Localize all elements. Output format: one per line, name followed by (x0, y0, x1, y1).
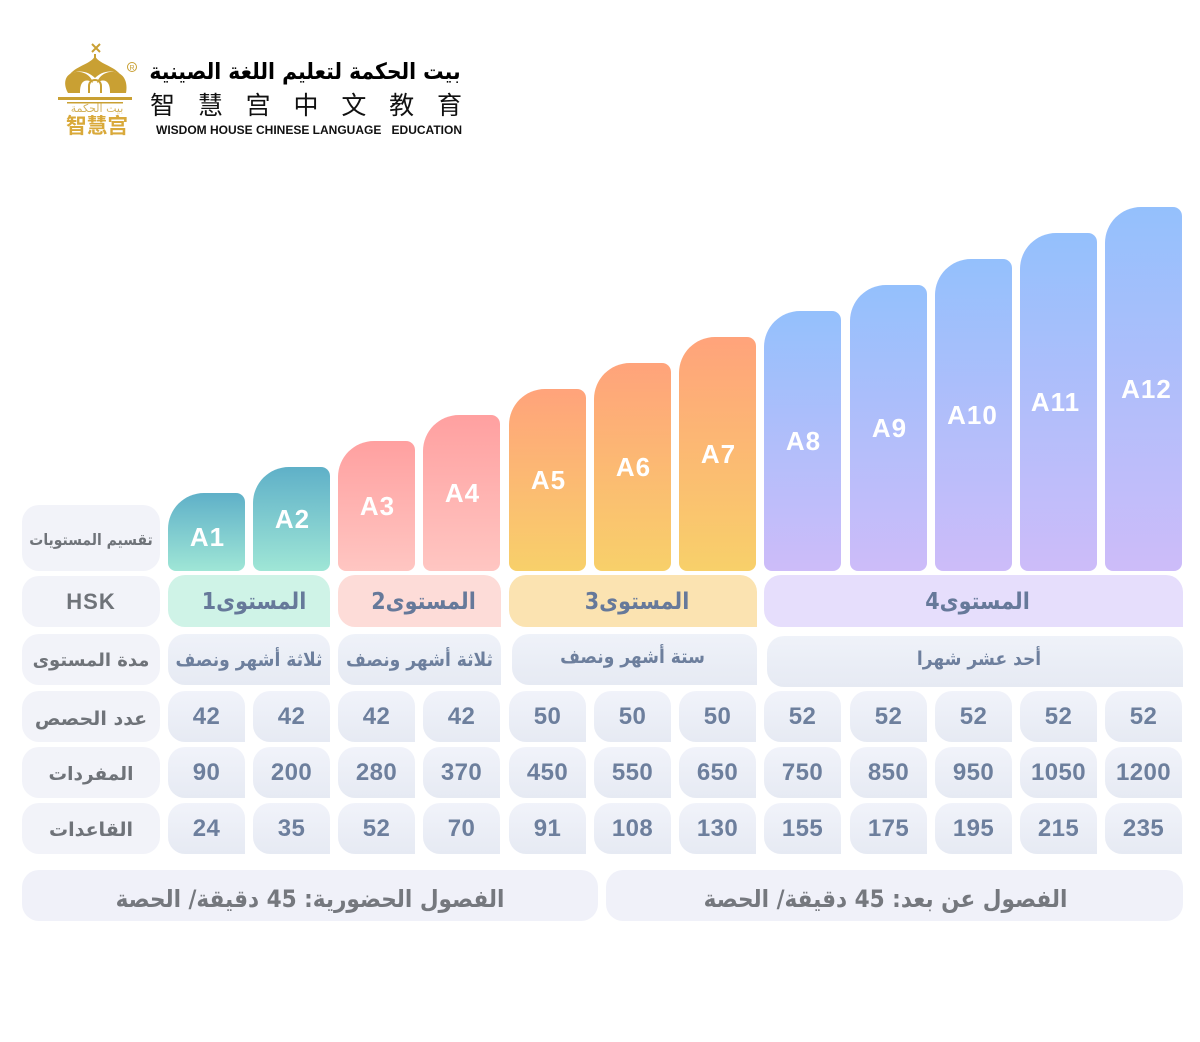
label A7: A7 (701, 439, 736, 469)
HSK band: level 2 (338, 575, 501, 627)
A3 vocabulary (338, 747, 415, 798)
A6 sessions (594, 691, 671, 742)
A6 vocabulary: 550 (612, 758, 653, 786)
A4 sessions: 42 (448, 702, 475, 730)
HSK band: level 3 (509, 575, 757, 627)
HSK band: level 1: المستوى1 (202, 589, 306, 615)
A9 grammar (850, 803, 927, 854)
bar A10 (935, 259, 1012, 571)
A12 sessions: 52 (1130, 702, 1157, 730)
HSK band: level 4 (764, 575, 1183, 627)
row label: sessions (22, 691, 160, 742)
A10 sessions: 52 (960, 702, 987, 730)
A4 grammar: 70 (448, 814, 475, 842)
logo arabic name: بيت الحكمة لتعليم اللغة الصينية (149, 59, 461, 85)
icon: golden dome emblem: بيت الحكمة (71, 102, 123, 115)
label A3: A3 (360, 491, 395, 521)
A8 sessions (764, 691, 841, 742)
A7 grammar: 130 (697, 814, 738, 842)
label A12: A12 (1121, 374, 1172, 404)
label A11: A11 (1031, 387, 1080, 417)
footer: online classes: الفصول عن بعد: 45 دقيقة/ الحصة (704, 884, 1067, 912)
label A6: A6 (616, 452, 651, 482)
icon: golden dome emblem: R (129, 65, 135, 72)
grammar row (168, 803, 1182, 854)
bar A6 (594, 363, 671, 571)
staircase chart: levels A1-A12 (168, 207, 1182, 571)
footer: online classes (606, 870, 1183, 921)
row label: sessions: عدد الحصص (35, 708, 147, 730)
footer: in-person classes: الفصول الحضورية: 45 دقيقة/ الحصة (116, 884, 504, 912)
logo chinese name: 育 (437, 86, 462, 122)
A10 vocabulary: 950 (953, 758, 994, 786)
A12 vocabulary: 1200 (1116, 758, 1171, 786)
A9 vocabulary: 850 (868, 758, 909, 786)
duration: level 2 (338, 634, 501, 685)
A2 grammar: 35 (278, 814, 305, 842)
label A8: A8 (786, 426, 821, 456)
logo chinese name: 智 (150, 86, 175, 122)
A1 sessions (168, 691, 245, 742)
A11 vocabulary: 1050 (1031, 758, 1086, 786)
HSK band: level 3: المستوى3 (585, 589, 689, 615)
row label: HSK (22, 576, 160, 627)
A4 vocabulary (423, 747, 500, 798)
A6 grammar (594, 803, 671, 854)
A10 vocabulary (935, 747, 1012, 798)
A4 sessions (423, 691, 500, 742)
A3 sessions: 42 (363, 702, 390, 730)
A2 sessions: 42 (278, 702, 305, 730)
A5 grammar: 91 (534, 814, 561, 842)
A2 vocabulary (253, 747, 330, 798)
A5 vocabulary (509, 747, 586, 798)
bar A4 (423, 415, 500, 571)
logo chinese name: 文 (341, 86, 366, 122)
A12 vocabulary (1105, 747, 1182, 798)
A7 grammar (679, 803, 756, 854)
row label: vocabulary: المفردات (49, 764, 133, 784)
A10 sessions (935, 691, 1012, 742)
A8 vocabulary (764, 747, 841, 798)
A11 grammar (1020, 803, 1097, 854)
A1 sessions: 42 (193, 702, 220, 730)
A2 sessions (253, 691, 330, 742)
duration: level 3 (512, 634, 757, 685)
HSK band: level 1 (168, 575, 330, 627)
A1 grammar: 24 (193, 814, 220, 842)
bar A5 (509, 389, 586, 571)
A2 grammar (253, 803, 330, 854)
bar A8 (764, 311, 841, 571)
A12 sessions (1105, 691, 1182, 742)
bar A9 (850, 285, 927, 571)
HSK band: level 4: المستوى4 (925, 589, 1030, 615)
A11 sessions: 52 (1045, 702, 1072, 730)
A1 vocabulary: 90 (193, 758, 220, 786)
A12 grammar (1105, 803, 1182, 854)
A7 vocabulary (679, 747, 756, 798)
duration: level 4 (767, 636, 1183, 687)
A7 sessions (679, 691, 756, 742)
row label: level duration: مدة المستوى (33, 650, 149, 670)
bar A11 (1020, 233, 1097, 571)
A2 vocabulary: 200 (271, 758, 312, 786)
A7 sessions: 50 (704, 702, 731, 730)
A4 grammar (423, 803, 500, 854)
A3 grammar: 52 (363, 814, 390, 842)
duration: level 1 (168, 634, 330, 685)
row label: level duration (22, 634, 160, 685)
logo chinese name: 宫 (246, 86, 271, 122)
A10 grammar (935, 803, 1012, 854)
A12 grammar: 235 (1123, 814, 1164, 842)
A5 sessions: 50 (534, 702, 561, 730)
A10 grammar: 195 (953, 814, 994, 842)
logo chinese name: 教 (389, 86, 414, 122)
logo chinese name: 慧 (198, 86, 223, 122)
label A5: A5 (531, 465, 566, 495)
A8 vocabulary: 750 (782, 758, 823, 786)
A9 sessions (850, 691, 927, 742)
A11 vocabulary (1020, 747, 1097, 798)
A5 grammar (509, 803, 586, 854)
row label: level division: تقسيم المستويات (29, 531, 153, 549)
duration: level 2: ثلاثة أشهر ونصف (346, 648, 493, 670)
A1 grammar (168, 803, 245, 854)
logo english name: EDUCATION (392, 123, 462, 137)
bar A12 (1105, 207, 1182, 571)
label A4: A4 (445, 478, 480, 508)
logo (58, 43, 462, 140)
A5 vocabulary: 450 (527, 758, 568, 786)
A1 vocabulary (168, 747, 245, 798)
vocabulary row (168, 747, 1182, 798)
bar A2 (253, 467, 330, 571)
icon: golden dome emblem: 智慧宫 (66, 110, 128, 140)
A9 sessions: 52 (875, 702, 902, 730)
bar A7 (679, 337, 756, 571)
row label: grammar (22, 803, 160, 854)
A11 grammar: 215 (1038, 814, 1079, 842)
A3 vocabulary: 280 (356, 758, 397, 786)
row label: HSK: HSK (66, 588, 116, 614)
label A2: A2 (275, 504, 310, 534)
A3 grammar (338, 803, 415, 854)
A6 vocabulary (594, 747, 671, 798)
bar A3 (338, 441, 415, 571)
A8 grammar: 155 (782, 814, 823, 842)
sessions row (168, 691, 1182, 742)
bar A1 (168, 493, 245, 571)
label A1: A1 (190, 522, 225, 552)
icon: golden dome emblem (58, 43, 137, 140)
duration: level 3: ستة أشهر ونصف (560, 646, 705, 668)
A6 sessions: 50 (619, 702, 646, 730)
duration: level 4: أحد عشر شهرا (917, 648, 1041, 670)
logo english name: WISDOM HOUSE CHINESE LANGUAGE (156, 123, 381, 137)
A11 sessions (1020, 691, 1097, 742)
A6 grammar: 108 (612, 814, 653, 842)
A9 vocabulary (850, 747, 927, 798)
footer: in-person classes (22, 870, 598, 921)
A3 sessions (338, 691, 415, 742)
label A10: A10 (947, 400, 998, 430)
HSK band: level 2: المستوى2 (371, 589, 476, 615)
A5 sessions (509, 691, 586, 742)
row label: vocabulary (22, 747, 160, 798)
row label: level division (22, 505, 160, 571)
logo chinese name: 中 (293, 86, 318, 122)
A7 vocabulary: 650 (697, 758, 738, 786)
logo chinese name (150, 86, 462, 122)
A9 grammar: 175 (868, 814, 909, 842)
label A9: A9 (872, 413, 907, 443)
A8 sessions: 52 (789, 702, 816, 730)
duration: level 1: ثلاثة أشهر ونصف (176, 648, 322, 670)
row label: grammar: القاعدات (49, 818, 133, 840)
A8 grammar (764, 803, 841, 854)
A4 vocabulary: 370 (441, 758, 482, 786)
